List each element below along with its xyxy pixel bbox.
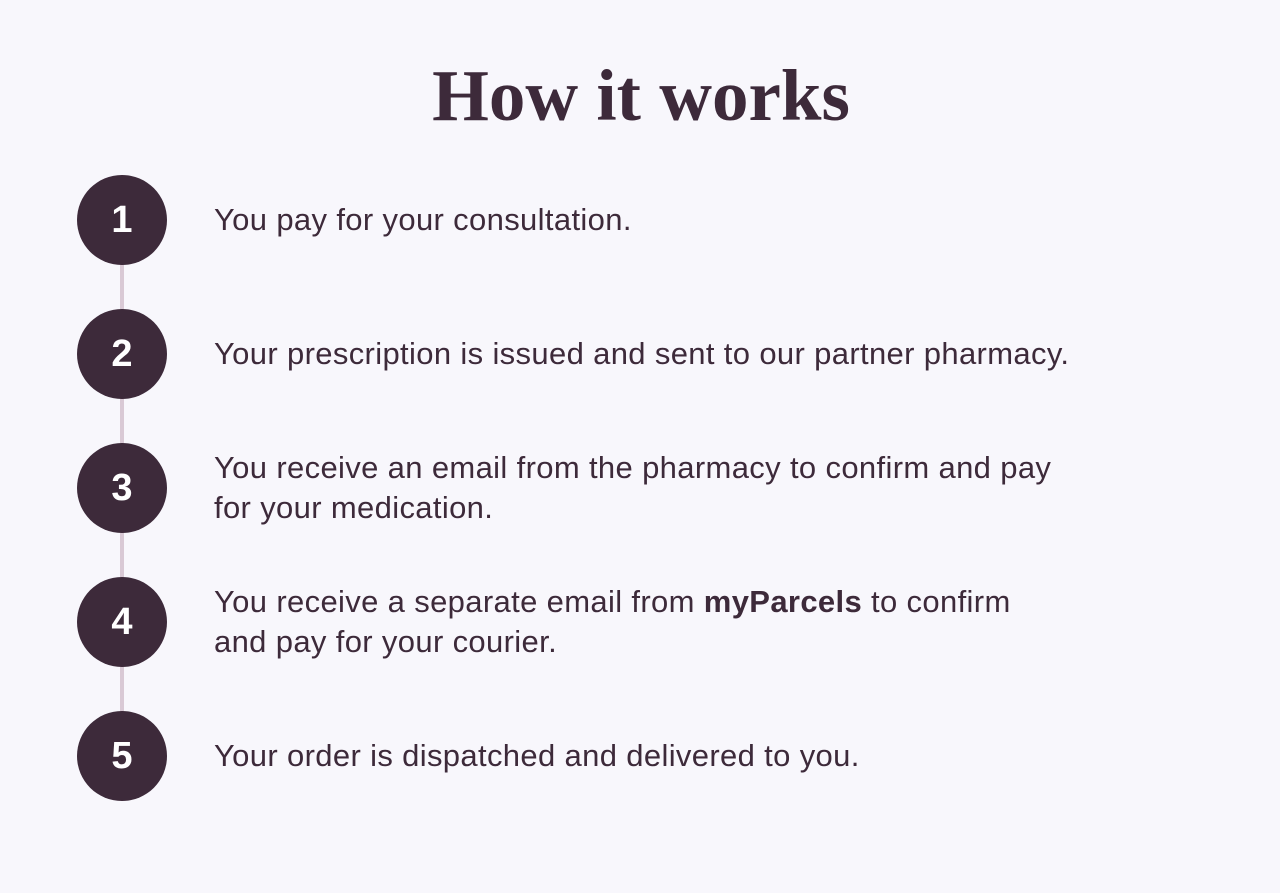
circle 4: 4 — [111, 601, 133, 643]
step 3 — [77, 443, 1051, 533]
title: How it works — [432, 55, 850, 136]
circle 5 — [77, 711, 167, 801]
text 5: Your order is dispatched and delivered to you. — [214, 738, 860, 773]
text 4: You receive a separate email from myParcels to confirm — [214, 584, 1011, 619]
circle 4 — [77, 577, 167, 667]
text 3: You receive an email from the pharmacy to confirm and pay — [214, 450, 1051, 485]
circle 1: 1 — [111, 199, 133, 241]
step 5 — [77, 711, 860, 801]
text 4 — [214, 584, 1011, 659]
text 3 — [214, 450, 1051, 525]
circle 1 — [77, 175, 167, 265]
step 1 — [77, 175, 632, 265]
circle 3: 3 — [111, 467, 133, 509]
circle 5: 5 — [111, 735, 133, 777]
step 4 — [77, 577, 1011, 667]
circle 2 — [77, 309, 167, 399]
text 4: and pay for your courier. — [214, 624, 557, 659]
text 3: for your medication. — [214, 490, 493, 525]
circle 3 — [77, 443, 167, 533]
text 1: You pay for your consultation. — [214, 202, 632, 237]
circle 2: 2 — [111, 333, 133, 375]
step 2 — [77, 309, 1069, 399]
text 2: Your prescription is issued and sent to our partner pharmacy. — [214, 336, 1069, 371]
